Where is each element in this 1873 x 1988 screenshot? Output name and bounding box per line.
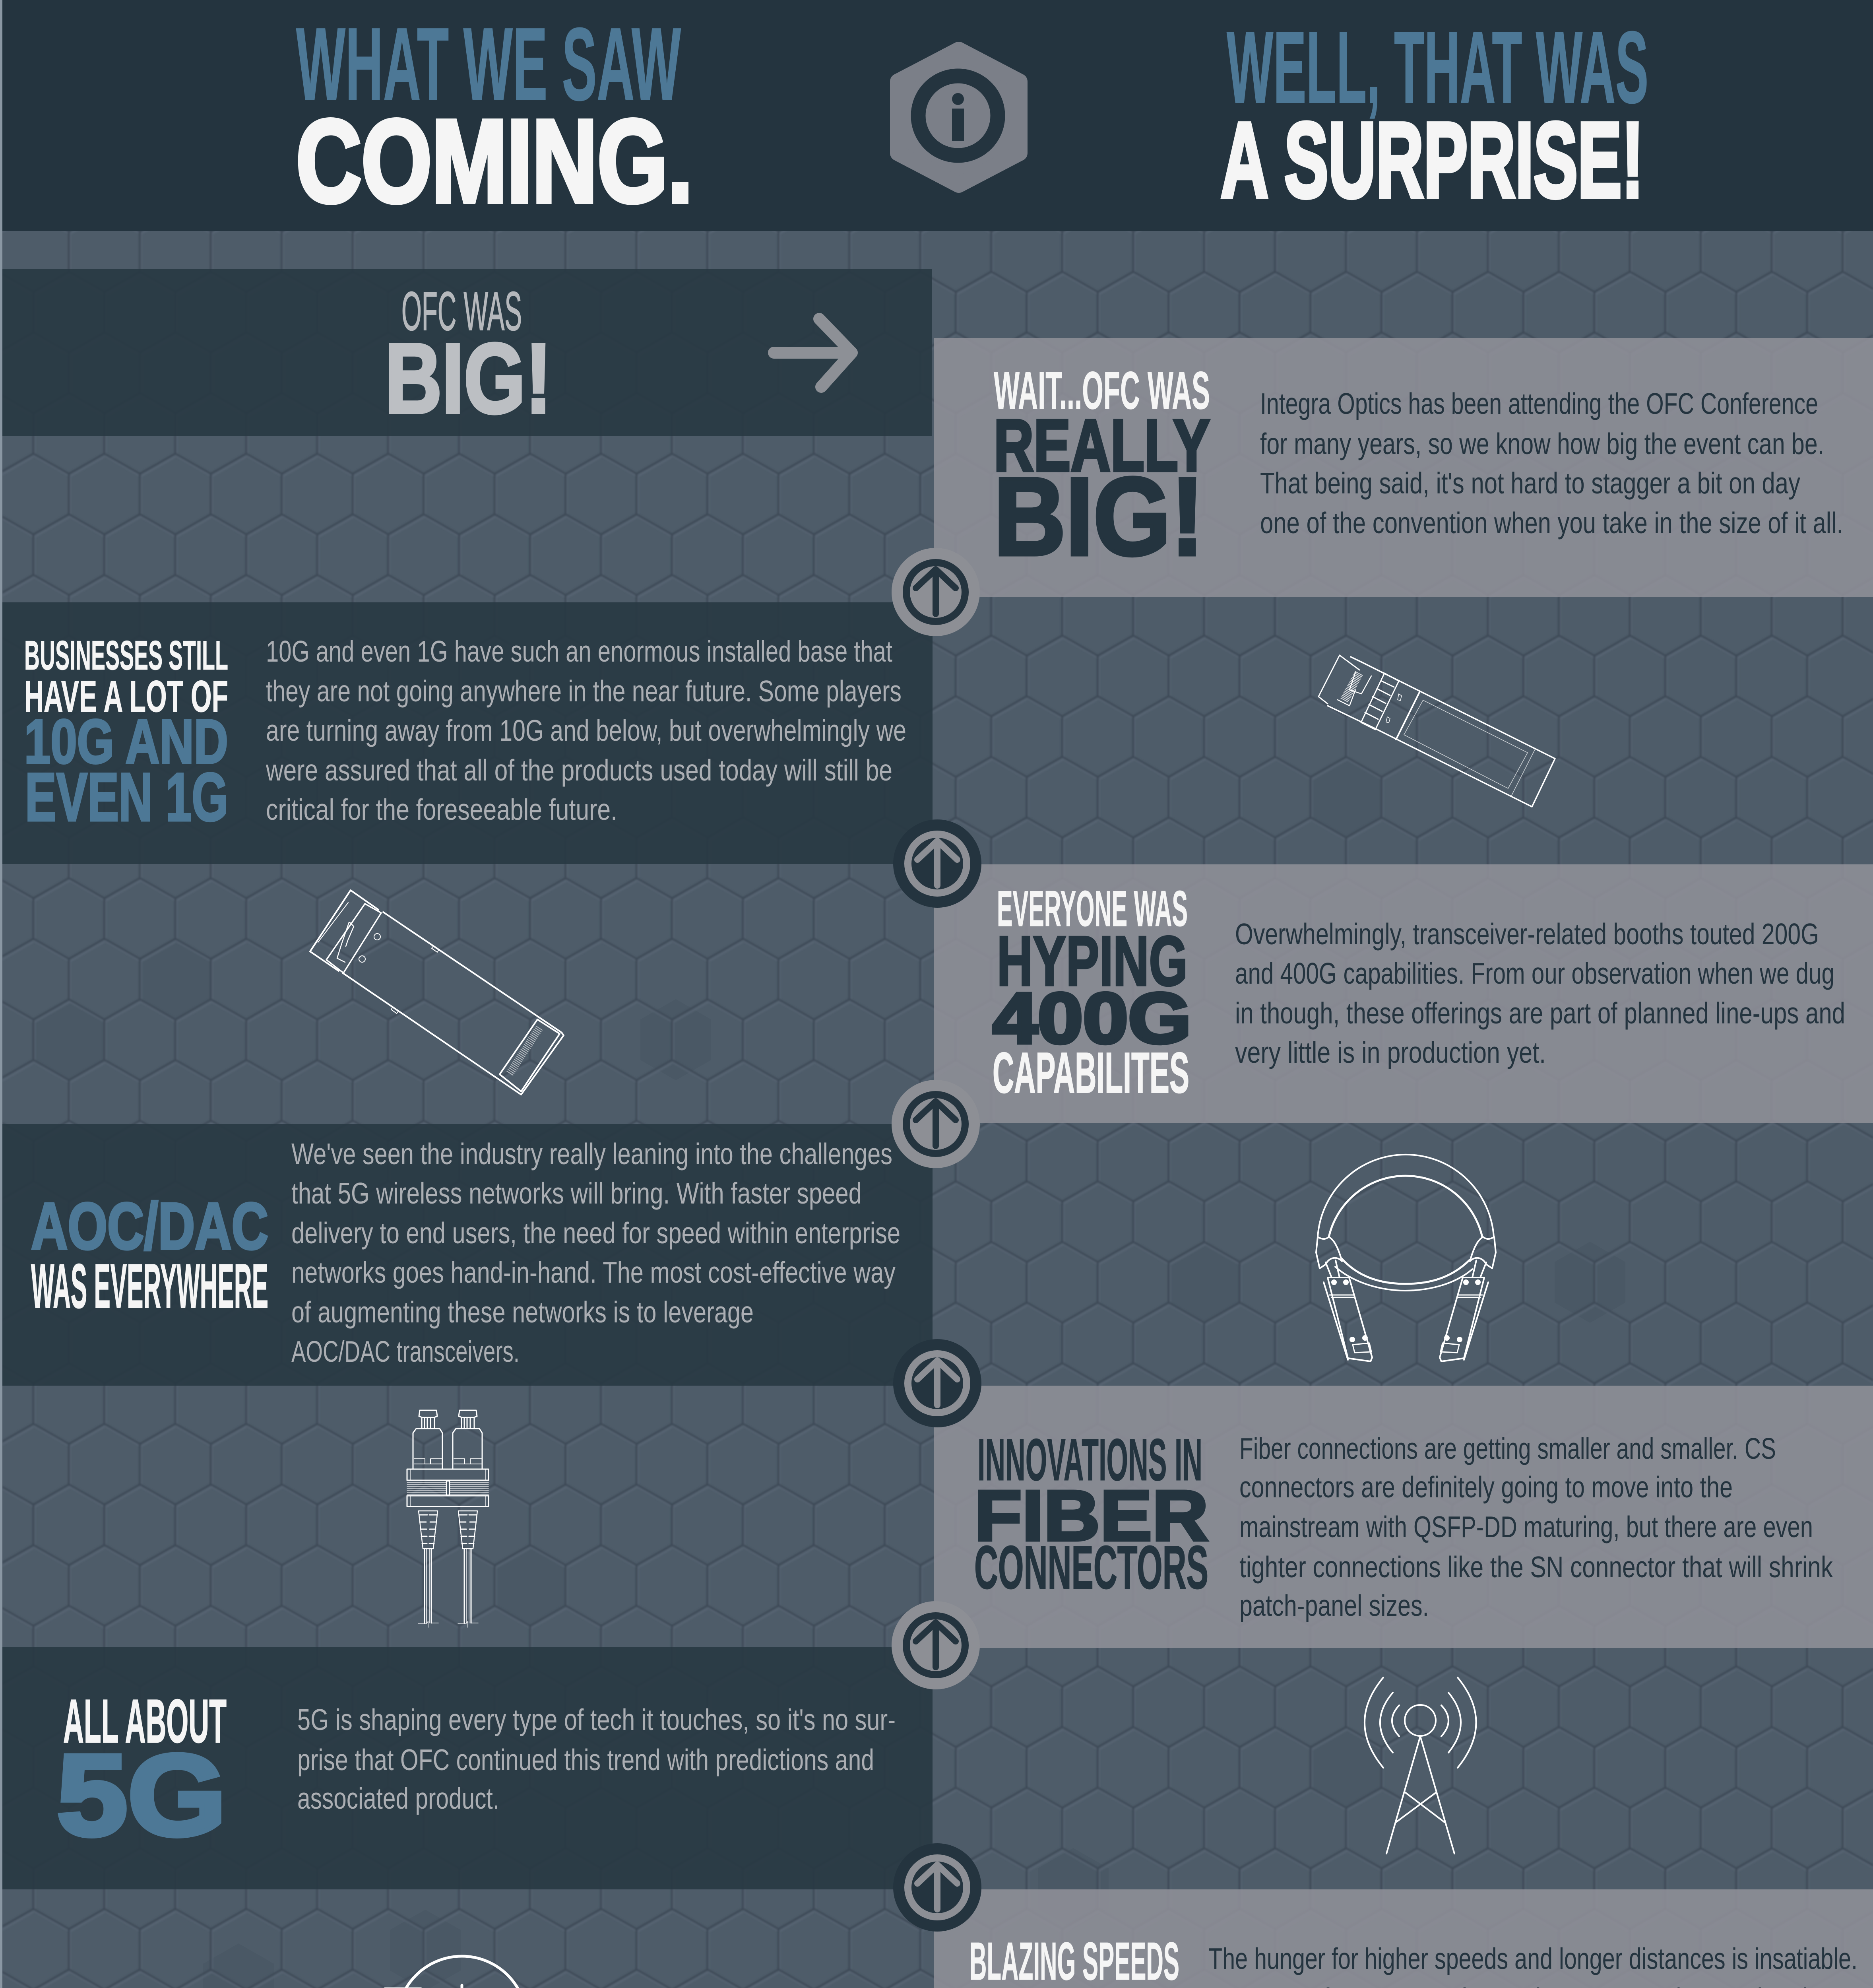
icon: speeding clock <box>342 1956 527 1988</box>
icon part: flange <box>407 1469 489 1507</box>
body text <box>291 1137 900 1368</box>
body text: that 5G wireless networks will bring. With faster speed <box>291 1176 862 1210</box>
body text: AOC/DAC transceivers. <box>291 1335 520 1368</box>
heading: 5G: 5G <box>57 1731 227 1860</box>
heading: wait OFC was: WAIT...OFC WAS <box>994 361 1210 420</box>
heading: businesses still: BUSINESSES STILL <box>24 633 228 679</box>
icon part: right connector <box>1440 1237 1496 1361</box>
panel: OFC was big (left): OFC WAS <box>401 281 522 342</box>
arrow badge 4 <box>893 1339 981 1427</box>
body text: of augmenting these networks is to leverage <box>291 1295 754 1329</box>
heading: fiber: FIBER <box>974 1476 1208 1556</box>
heading: big: BIG! <box>994 454 1204 578</box>
body text: connectors are definitely going to move into the <box>1239 1470 1733 1504</box>
body text <box>1260 387 1843 540</box>
heading: capabilites: CAPABILITES <box>993 1041 1189 1105</box>
arrow: to the right <box>774 319 852 387</box>
heading: 10G and: 10G AND <box>24 707 228 777</box>
panel: AOC/DAC was everywhere (left): WAS EVERYWHERE <box>31 1251 268 1321</box>
arrow badge 6 <box>893 1843 981 1932</box>
body text: critical for the foreseeable future. <box>266 793 617 826</box>
panel: all about 5G (left) <box>2 1647 933 1889</box>
heading: have a lot of: HAVE A LOT OF <box>24 672 228 721</box>
panel: businesses still have 10G and 1G (left) <box>2 602 933 864</box>
panel: everyone was hyping 400G (right) <box>934 864 1873 1123</box>
body text: very little is in production yet. <box>1235 1036 1546 1069</box>
body text <box>297 1703 896 1815</box>
body text: associated product. <box>297 1782 499 1815</box>
heading: hyping: HYPING <box>997 922 1188 1000</box>
body text: prise that OFC continued this trend with predictions and <box>297 1743 874 1776</box>
icon: transceiver 1 (right of row 2) <box>1318 655 1555 807</box>
arrow badge 1 <box>892 548 980 636</box>
panel: wait, OFC was really big (right) <box>934 338 1873 597</box>
title: what we saw: WHAT WE SAW <box>296 7 681 122</box>
body text: were assured that all of the products used today will still be <box>266 753 892 787</box>
arrow badge 5 <box>892 1601 980 1689</box>
arrow badge 3 <box>892 1080 980 1168</box>
icon part: right plug <box>453 1410 482 1627</box>
body text: they are not going anywhere in the near future. Some players <box>266 674 902 708</box>
panel: everyone was hyping 400G (right): EVERYONE WAS <box>997 880 1188 937</box>
panel: all about 5G (left): ALL ABOUT <box>63 1687 227 1755</box>
icon: transceiver 2 (left of row 3) <box>310 890 564 1095</box>
panel: blazing speeds on the horizon (right) <box>934 1889 1873 1988</box>
icon: duplex fiber connector <box>407 1410 489 1627</box>
panel: OFC was big (left) <box>2 269 932 436</box>
body text: networks goes hand-in-hand. The most cost-effective way <box>291 1256 896 1289</box>
heading: really: REALLY <box>994 405 1210 487</box>
icon: cell tower <box>1365 1677 1476 1854</box>
body text: 5G is shaping every type of tech it touches, so it's no sur- <box>297 1703 896 1736</box>
panel: innovations in fiber connectors (right) <box>934 1386 1873 1648</box>
icon part: left connector <box>1316 1237 1372 1361</box>
heading: connectors: CONNECTORS <box>974 1533 1208 1602</box>
icon: AOC/DAC cable <box>1316 1155 1496 1361</box>
heading: AOC/DAC: AOC/DAC <box>31 1190 268 1263</box>
body text: 10G and even 1G have such an enormous installed base that <box>266 635 892 668</box>
body text: are turning away from 10G and below, but overwhelmingly we <box>266 714 906 747</box>
body text <box>1239 1432 1833 1622</box>
arrow badge 2 <box>893 819 981 908</box>
body text: We've seen the industry really leaning into the challenges <box>291 1137 892 1171</box>
body text <box>1235 917 1845 1069</box>
header band <box>2 0 1873 231</box>
body text <box>266 635 906 826</box>
icon: info hexagon <box>898 50 1020 185</box>
body text: patch-panel sizes. <box>1239 1589 1429 1622</box>
icon part: left plug <box>413 1410 442 1627</box>
body text: delivery to end users, the need for speed within enterprise <box>291 1216 900 1250</box>
title: coming: COMING. <box>296 95 693 227</box>
panel: AOC/DAC was everywhere (left) <box>2 1124 933 1386</box>
heading: even 1G: EVEN 1G <box>25 759 228 835</box>
panel: innovations in fiber connectors (right): INNOVATIONS IN <box>977 1426 1202 1493</box>
heading: 400G: 400G <box>993 978 1191 1058</box>
heading: big: BIG! <box>385 323 552 434</box>
